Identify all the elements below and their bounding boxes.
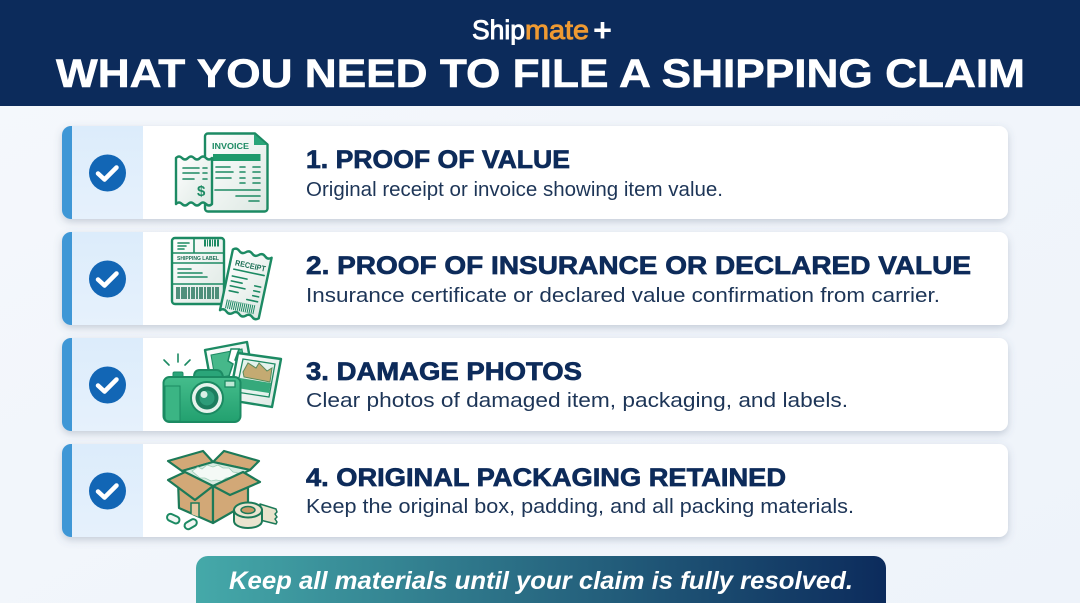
logo: Shipmate+: Ship (472, 15, 525, 45)
heading: 4. ORIGINAL PACKAGING RETAINED (306, 464, 786, 492)
icon: shipping label and receipt (172, 238, 272, 320)
description: Keep the original box, padding, and all packing materials. (306, 495, 854, 518)
header banner (0, 0, 1080, 106)
icon: check (89, 472, 126, 510)
logo: Shipmate+ (472, 12, 612, 48)
description: Clear photos of damaged item, packaging, and labels. (306, 389, 848, 412)
icon: invoice and receipt (176, 134, 268, 212)
panel: 4. original packaging (62, 444, 1008, 537)
heading: 2. PROOF OF INSURANCE OR DECLARED VALUE (306, 252, 971, 280)
icon: shipping label and receipt: RECEIPT (234, 258, 267, 274)
footer callout: Keep all materials until your claim is fully resolved. (229, 567, 853, 595)
icon: shipping label and receipt: SHIPPING LABEL (177, 256, 219, 262)
icon: check (89, 366, 126, 404)
logo: Shipmate+: mate (525, 15, 589, 45)
heading: 1. PROOF OF VALUE (306, 146, 570, 174)
footer callout (196, 556, 886, 603)
panel: 3. damage photos (62, 338, 1008, 431)
icon: check (89, 154, 126, 192)
logo: Shipmate+: + (593, 12, 612, 48)
icon: camera and damaged photos (164, 342, 281, 422)
description: Insurance certificate or declared value confirmation from carrier. (306, 284, 940, 307)
panel: 2. proof of insurance (62, 232, 1008, 325)
icon: invoice and receipt: INVOICE (212, 141, 249, 151)
heading: 3. DAMAGE PHOTOS (306, 358, 582, 386)
icon: invoice and receipt: $ (197, 183, 206, 200)
description: Original receipt or invoice showing item value. (306, 178, 723, 201)
icon: check (89, 260, 126, 298)
icon: open box, peanuts, tape (166, 451, 277, 530)
title: WHAT YOU NEED TO FILE A SHIPPING CLAIM (56, 52, 1025, 96)
panel: 1. proof of value (62, 126, 1008, 219)
